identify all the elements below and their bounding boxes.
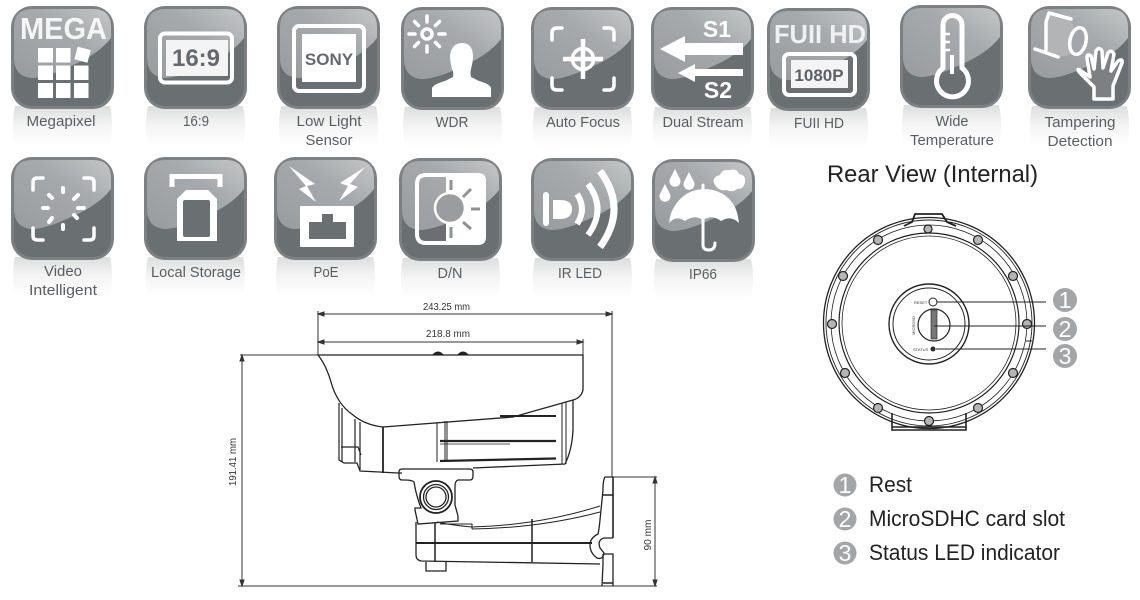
legend item 1: 1 bbox=[839, 472, 851, 498]
icon: focus target bbox=[552, 28, 614, 90]
label: Auto Focus: Auto Focus bbox=[546, 114, 620, 131]
callout numbers: 3 bbox=[1059, 343, 1071, 369]
dimension label 218.8: 218.8 mm bbox=[426, 329, 470, 340]
icon: IR waves bbox=[543, 171, 614, 247]
dimension label 90: 90 mm bbox=[643, 520, 654, 550]
label: Low Light Sensor: Sensor bbox=[306, 132, 353, 149]
top lug bbox=[904, 214, 956, 226]
tile: Tampering Detection bbox=[1028, 6, 1131, 150]
top bumps bbox=[432, 352, 469, 355]
tile: PoE bbox=[274, 157, 377, 297]
label: Low Light Sensor: Low Light bbox=[296, 113, 362, 130]
icon: FUII HD 1080P: 1080P bbox=[794, 66, 844, 85]
label: IP66: IP66 bbox=[689, 266, 717, 283]
dimension lines bbox=[238, 311, 657, 586]
icon: thermometer bbox=[936, 16, 969, 97]
diagram: rear view of the camera: MICROSD bbox=[911, 316, 916, 335]
tile: Video Intelligent bbox=[11, 157, 114, 299]
label: Tampering Detection: Detection bbox=[1048, 133, 1112, 150]
diagram: rear view of the camera bbox=[824, 214, 1077, 430]
legend item 1 bbox=[834, 472, 912, 498]
label: Local Storage: Local Storage bbox=[151, 264, 241, 281]
tile: Wide Temperature bbox=[900, 5, 1003, 149]
dimension label 243.25: 243.25 mm bbox=[423, 302, 470, 313]
arm and wall plate bbox=[416, 477, 613, 586]
label: PoE: PoE bbox=[314, 264, 338, 281]
tile: Full HD bbox=[767, 8, 870, 148]
label: Video Intelligent bbox=[29, 263, 98, 299]
legend item 3: 3 bbox=[839, 540, 851, 566]
icon: memory card bbox=[172, 176, 220, 241]
tile: IP66 bbox=[652, 159, 755, 299]
tile: Low Light Sensor bbox=[277, 6, 380, 149]
callout numbers: 2 bbox=[1059, 316, 1071, 342]
label: Video Intelligent: Intelligent bbox=[29, 282, 98, 299]
tile: WDR bbox=[401, 7, 504, 147]
icon: sun and person bbox=[409, 16, 491, 97]
icon: FUII HD 1080P bbox=[774, 19, 866, 95]
label: Wide Temperature bbox=[910, 113, 994, 149]
diagram: side view camera with dimensions bbox=[228, 302, 657, 586]
icon: SONY sensor: SONY bbox=[305, 50, 354, 69]
icon: PoE lightning and port bbox=[289, 166, 365, 247]
bottom bracket bbox=[892, 413, 966, 430]
icon: video analytics bbox=[33, 178, 94, 240]
diagram: rear view of the camera: STATUS bbox=[913, 347, 929, 352]
icon: 16:9 screen: 16:9 bbox=[172, 45, 220, 72]
icon: day night sun bbox=[417, 173, 486, 245]
sun hood bbox=[318, 355, 583, 427]
callout numbers: 1 bbox=[1059, 287, 1071, 313]
icon: S1 S2 arrows: S2 bbox=[704, 77, 732, 103]
tiny labels: RESET bbox=[914, 300, 928, 305]
housing rings bbox=[824, 218, 1034, 428]
legend bbox=[834, 472, 1065, 566]
legend item 3: Status LED indicator bbox=[869, 540, 1060, 565]
label: Wide Temperature: Wide bbox=[936, 113, 968, 130]
label: Dual Stream: Dual Stream bbox=[662, 114, 744, 131]
icon: FUII HD 1080P: FUII HD bbox=[774, 19, 866, 49]
tile: IR LED bbox=[531, 158, 634, 298]
label: Video Intelligent: Video bbox=[44, 263, 82, 280]
label: Megapixel: Megapixel bbox=[26, 113, 96, 130]
tile: D/N bbox=[399, 158, 502, 298]
mount bracket bbox=[399, 469, 473, 524]
icon: camera and hand bbox=[1035, 13, 1122, 99]
label: IR LED: IR LED bbox=[558, 265, 602, 282]
screw lugs bbox=[828, 225, 1032, 426]
label: Tampering Detection bbox=[1044, 114, 1116, 150]
tile: Auto Focus bbox=[531, 7, 634, 147]
label: 16:9: 16:9 bbox=[183, 113, 209, 130]
icon: MEGA pixel grid: MEGA bbox=[20, 11, 107, 46]
callout numbers bbox=[1053, 287, 1077, 369]
legend item 2: 2 bbox=[839, 506, 851, 532]
legend item 1: Rest bbox=[869, 472, 912, 497]
heading: Rear View (Internal): Rear View (Internal) bbox=[827, 161, 1038, 188]
label: FUII HD: FUII HD bbox=[794, 115, 844, 132]
tile: Dual Stream bbox=[651, 7, 754, 147]
tile: 16:9 bbox=[144, 6, 247, 146]
label: Low Light Sensor bbox=[296, 113, 362, 149]
icon: SONY sensor bbox=[294, 26, 364, 91]
label: WDR: WDR bbox=[436, 114, 469, 131]
icon: S1 S2 arrows: S1 bbox=[703, 16, 731, 42]
legend item 2: MicroSDHC card slot bbox=[869, 506, 1065, 531]
label: Wide Temperature: Temperature bbox=[910, 132, 994, 149]
tile: Megapixel bbox=[11, 6, 114, 146]
label: D/N: D/N bbox=[438, 265, 462, 282]
icon: S1 S2 arrows bbox=[660, 16, 743, 103]
centre cover bbox=[889, 284, 969, 364]
tile: Local Storage bbox=[144, 157, 247, 297]
leader lines bbox=[934, 302, 1046, 349]
camera body bbox=[339, 400, 573, 473]
dimension label 191.41: 191.41 mm bbox=[228, 438, 239, 486]
label: Tampering Detection: Tampering bbox=[1044, 114, 1116, 131]
icon: umbrella, rain, cloud bbox=[660, 169, 745, 250]
